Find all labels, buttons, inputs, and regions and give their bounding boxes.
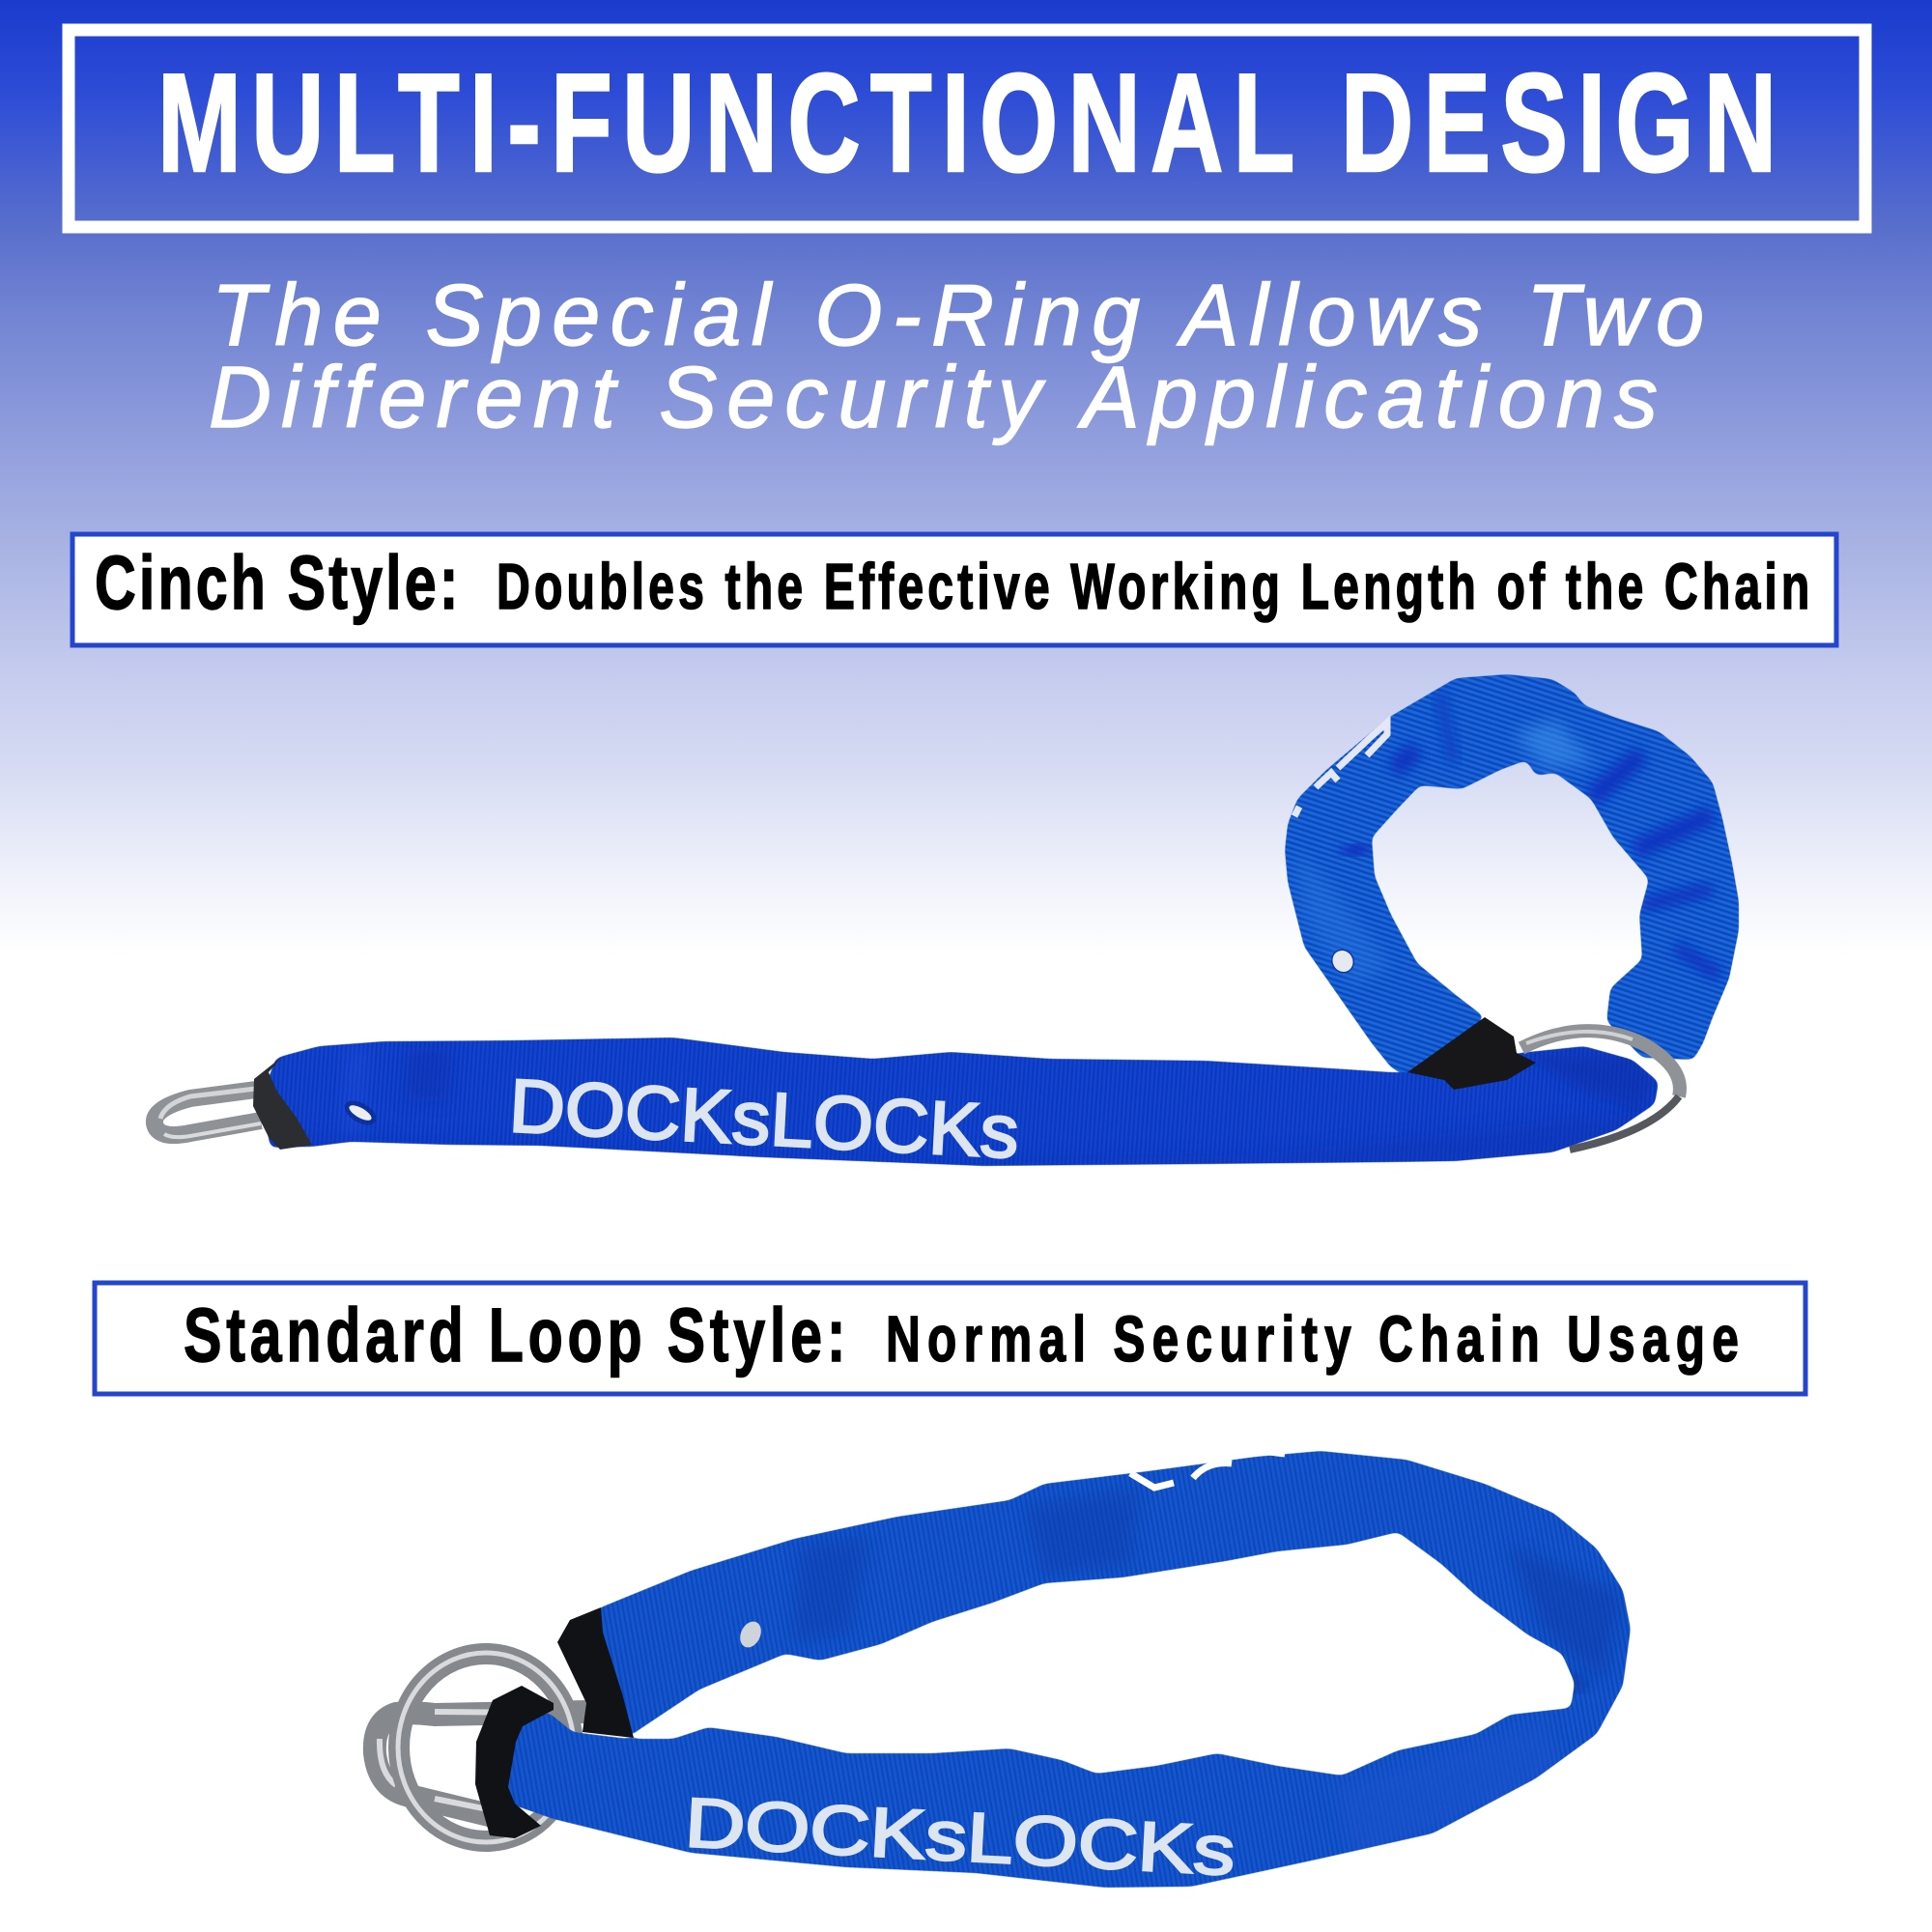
black strap [475, 1686, 554, 1838]
label: standard loop style: Normal Security Chain Usage [886, 1304, 1739, 1376]
brand text: DOCKsLOCKs [507, 1063, 1021, 1175]
subtitle [209, 268, 1704, 446]
title text: MULTI-FUNCTIONAL DESIGN [157, 44, 1776, 201]
upper loop sleeve [1285, 674, 1739, 1072]
black strap [1407, 1017, 1536, 1090]
chain photo: cinch style [155, 657, 1758, 1179]
black cuff [253, 1056, 312, 1150]
brand text: DOCKsLOCKs [683, 1784, 1237, 1890]
label: standard loop style [95, 1283, 1805, 1394]
title frame [69, 30, 1865, 227]
o-ring [1521, 1031, 1680, 1150]
label: cinch style: Cinch Style: [95, 540, 459, 625]
label: standard loop style: Standard Loop Style: [184, 1293, 846, 1378]
logo fragments on top edge [1130, 1449, 1285, 1488]
black cuff [557, 1607, 634, 1738]
chain photo: standard loop [375, 1439, 1642, 1903]
label: cinch style: Doubles the Effective Working Length of the Chain [497, 551, 1809, 623]
hole near cuff [340, 1095, 381, 1130]
hole in upper sleeve [1327, 946, 1358, 977]
title banner [69, 30, 1865, 227]
sleeve [493, 1439, 1642, 1903]
o-ring [398, 1653, 574, 1842]
logo fragments on loop [1294, 723, 1387, 816]
subtitle: The Special O-Ring Allows Two [212, 268, 1704, 364]
shackle [155, 1089, 261, 1137]
hole [736, 1618, 765, 1651]
lower sleeve [268, 1037, 1658, 1167]
subtitle: Different Security Applications [209, 350, 1658, 446]
label: cinch style [72, 534, 1836, 645]
shackle [375, 1712, 589, 1816]
